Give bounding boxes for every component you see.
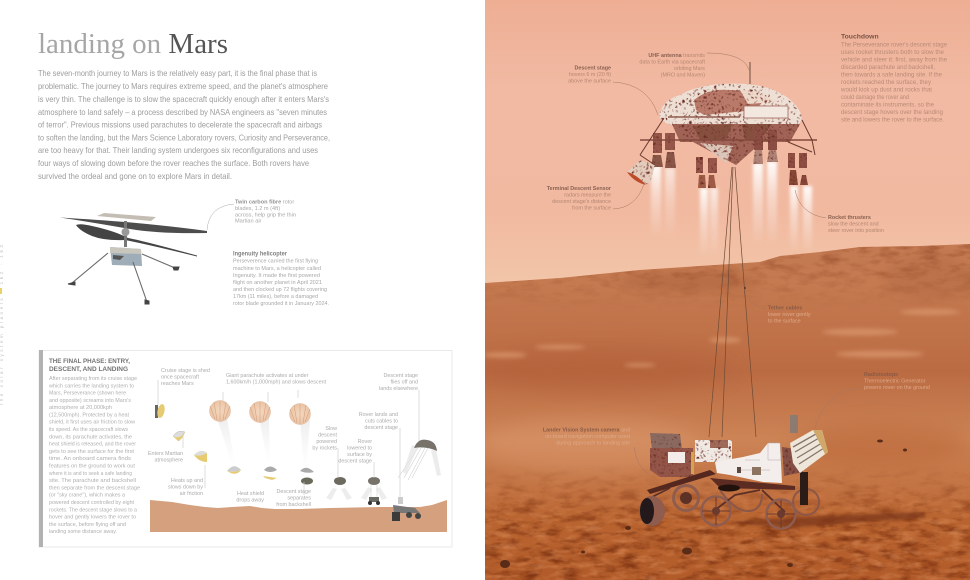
diagram labels: powered xyxy=(316,439,337,445)
text block: Touchdown: contaminate its instruments, so the xyxy=(841,102,935,108)
callout: descent stage: above the surface xyxy=(568,78,611,84)
panel text: atmosphere at 20,000kph xyxy=(49,405,112,411)
white panel on top xyxy=(744,106,788,118)
callout: terminal descent sensor: from the surface xyxy=(572,206,611,212)
callout: UHF antenna xyxy=(639,53,749,78)
diagram labels: Descent stage xyxy=(277,489,311,495)
text block: Touchdown: uses rocket thrusters both to slow the xyxy=(841,49,945,56)
diagram labels: lands elsewhere xyxy=(379,386,418,392)
callout: tether cables: to the surface xyxy=(768,318,801,324)
diagram labels: separates xyxy=(287,496,311,502)
panel text: shield, it first uses air friction to slow xyxy=(49,420,136,426)
diagram labels: surface by xyxy=(347,452,372,458)
panel text: hover and gently lowers the rover to xyxy=(49,515,136,521)
text block: Touchdown: rockets reached the surface, they xyxy=(841,79,932,86)
intro text block: survived the ordeal and gone on to explore Mars in detail. xyxy=(38,171,232,181)
body xyxy=(110,247,142,266)
text block: Ingenuity helicopter: flight on another planet in April 2021 xyxy=(233,280,322,286)
callout: descent stage xyxy=(568,66,658,115)
callout: radioisotope generator xyxy=(815,372,930,428)
light streak patches xyxy=(483,309,960,367)
icon: Perseverance rover xyxy=(639,415,828,528)
panel text: site. The parachute and backshell xyxy=(49,478,136,484)
panel text: powered descent controlled by eight xyxy=(49,500,134,506)
panel text: then separate from the descent stage xyxy=(49,485,140,491)
callout: UHF antenna: (MRO and Maven) xyxy=(661,72,705,78)
neck xyxy=(782,447,803,476)
sequence: entry capsules xyxy=(155,403,241,474)
diagram labels: Descent stage xyxy=(384,373,418,379)
panel text: where it is and to seek a safe landing xyxy=(48,471,132,477)
icon: descent stage xyxy=(627,62,817,188)
diagram labels: cuts cables to xyxy=(365,418,398,424)
panel text: down, its parachute activates, the xyxy=(49,434,132,440)
solar panel xyxy=(97,213,156,221)
diagram labels: descent stage xyxy=(338,458,372,464)
near centre wheel xyxy=(702,496,730,526)
intro text block: problematic. The journey to Mars requires extreme speed, and the planet's atmosphere xyxy=(38,81,328,91)
ground strip xyxy=(150,500,447,532)
front equipment xyxy=(650,448,693,477)
rear deck xyxy=(695,440,732,462)
tether cables xyxy=(709,167,756,437)
near right wheel xyxy=(766,500,796,528)
machinery deck xyxy=(672,124,800,165)
text block: Touchdown: would kick up dust and rocks that xyxy=(840,86,932,94)
panel text: (12,500mph). Protected by a heat xyxy=(49,412,129,418)
intro text block: are too heavy for that. Their landing system undergoes six reconfigurations and uses xyxy=(38,145,318,155)
text block: Touchdown: descent stage hovers over the landing xyxy=(841,109,944,116)
title: landing on Mars xyxy=(38,29,228,60)
callout: rocket thrusters: Rocket thrusters xyxy=(828,215,871,221)
panel text: Mars, Perseverance (shown here xyxy=(49,390,126,396)
diagram labels: Cruise stage is shed xyxy=(161,368,210,374)
diagram labels: descent xyxy=(318,432,337,438)
diagram labels: once spacecraft xyxy=(161,374,200,380)
text block: Touchdown: site and lowers the rover to the surface. xyxy=(841,116,944,124)
icon: Ingenuity helicopter xyxy=(60,213,207,304)
panel: Mars landscape photo xyxy=(470,0,970,580)
diagram labels: 1,600km/h (1,000mph) and slows descent xyxy=(226,379,327,385)
engines centre xyxy=(696,157,717,173)
diagram labels: descent stage xyxy=(364,425,398,431)
intro text block: four ways of slowing down before the rover reaches the surface. Both rovers have xyxy=(38,158,309,168)
terrain shading xyxy=(626,274,754,290)
upper body xyxy=(659,84,802,130)
callout: terminal descent sensor: Terminal Descent Sensor xyxy=(547,186,612,192)
intro text block: is very thin. The challenge is to slow the spacecraft quickly enough after it enters Mars's xyxy=(38,94,329,104)
diagram labels: slows down by xyxy=(168,484,203,490)
panel text: (or "sky crane"), which makes a xyxy=(49,493,126,499)
panel text: the surface, before flying off and xyxy=(49,522,126,528)
callout: lander vision system: Lander Vision System camera and xyxy=(543,428,630,434)
callout: lander vision system: during approach to landing site xyxy=(556,440,630,446)
diagram labels: lowered to xyxy=(347,446,372,452)
callout: terminal descent sensor: radars measure the xyxy=(564,192,611,198)
rocks xyxy=(500,440,907,568)
callout: rotor blades xyxy=(207,200,296,230)
sequence: parachutes xyxy=(210,400,310,470)
text block: Touchdown: discarded parachute and backshell, xyxy=(841,64,935,71)
panel text xyxy=(48,376,140,535)
callout: descent stage: hovers 6 m (20 ft) xyxy=(569,72,611,78)
intro text block: to soften the landing, but the Mars Science Laboratory rovers, Curiosity and Perseverance, xyxy=(38,132,330,142)
panel text: time. An onboard camera finds xyxy=(49,456,131,462)
diagram labels: air friction xyxy=(180,491,203,497)
diagram leader lines xyxy=(158,380,419,498)
text block: Touchdown: The Perseverance rover's descent stage xyxy=(841,42,948,48)
callout: tether cables: lower rover gently xyxy=(768,312,811,318)
panel text: features on the ground to work out xyxy=(49,464,135,470)
far wheels xyxy=(674,486,698,510)
callout: UHF antenna: data to Earth via spacecraft xyxy=(639,60,705,66)
intro text block: of terror". Previous missions used parachutes to decelerate the spacecraft and airbags xyxy=(38,120,322,130)
page background xyxy=(0,0,485,580)
text block: Ingenuity helicopter: rotor blade grounded it in January 2024. xyxy=(233,301,329,307)
diagram labels: by rockets xyxy=(312,446,337,452)
text block: Ingenuity helicopter: Ingenuity helicopter xyxy=(233,250,288,258)
terminal descent sensor xyxy=(627,160,655,185)
callout: UHF antenna: UHF antenna transmits xyxy=(648,53,705,59)
sequence: rover lands, stage flies off xyxy=(392,440,441,521)
panel text: landing some distance away. xyxy=(49,529,117,535)
text block: Ingenuity helicopter: Perseverence carried the first flying xyxy=(233,259,318,265)
callout: UHF antenna: orbiting Mars xyxy=(674,66,705,72)
diagram labels: Rover lands and xyxy=(359,412,398,418)
diagram labels: Heat shield xyxy=(237,491,264,497)
text block: Ingenuity helicopter: machine to Mars, a helicopter called xyxy=(233,266,321,272)
near left wheel xyxy=(639,496,665,526)
struts xyxy=(640,139,817,141)
diagram labels: from backshell xyxy=(276,502,311,508)
diagram labels: atmosphere xyxy=(155,458,183,464)
callout: radioisotope generator: Radioisotope xyxy=(864,372,898,378)
callout: rotor blades: across, help grip the thin xyxy=(235,212,296,218)
panel text: gets to see the surface for the first xyxy=(49,449,134,455)
rocket plumes xyxy=(651,161,812,258)
panel heading: THE FINAL PHASE: ENTRY, xyxy=(49,358,130,365)
panel text: rockets. The descent stage slows to a xyxy=(49,507,138,513)
callout: tether cables: Tether cables xyxy=(768,306,802,312)
engines left xyxy=(653,133,675,153)
intro text block: atmosphere to land safely – a process described by NASA engineers as "seven minutes xyxy=(38,107,327,117)
callout: rotor blades: Martian air xyxy=(235,218,262,224)
panel text: which carries the landing system to xyxy=(48,383,134,389)
panel text: its speed. As the spacecraft slows xyxy=(49,427,128,433)
diagram labels: Rover xyxy=(358,439,372,445)
text block: Ingenuity helicopter xyxy=(233,250,329,307)
diagram labels: Giant parachute activates at under xyxy=(226,373,309,379)
intro text block: The seven-month journey to Mars is the relatively easy part, it is the final phase that is xyxy=(38,68,317,78)
callout: terminal descent sensor: descent stage's distance xyxy=(552,199,611,205)
callout: rocket thrusters: steer rover into position xyxy=(828,228,884,234)
diagram labels: Slow xyxy=(325,426,337,432)
callout: rotor blades: blades, 1.2 m (4ft) xyxy=(235,206,280,212)
sequence: shield and stage separation xyxy=(263,466,314,484)
rover shadow xyxy=(725,512,925,528)
intro text block xyxy=(38,68,330,181)
text block: Ingenuity helicopter: 17km (11 miles), before a damaged xyxy=(233,294,318,300)
callout: terminal descent sensor xyxy=(547,184,644,212)
rotor blades xyxy=(60,218,207,233)
stand xyxy=(790,415,798,433)
panel text: After separating from its cruise stage xyxy=(49,376,137,382)
main body xyxy=(715,443,782,483)
engines right xyxy=(754,127,777,150)
panel text: heat shield is released, and the rover xyxy=(49,442,136,448)
diagram labels: reaches Mars xyxy=(161,381,194,387)
callout: rotor blades: Twin carbon fibre rotor xyxy=(235,200,294,206)
callout: descent stage: Descent stage xyxy=(574,66,611,72)
text block: Ingenuity helicopter: Ingenuity. It made the first powered xyxy=(233,273,320,279)
sequence: powered descent xyxy=(326,477,387,505)
diagram labels: drops away xyxy=(236,498,264,504)
callout: rocket thrusters: slow the descent and xyxy=(828,222,879,228)
panel: the final phase xyxy=(39,350,452,547)
panel heading xyxy=(49,358,130,373)
diagram labels: flies off and xyxy=(391,380,418,386)
panel text: and opposite) screams into Mars's xyxy=(49,398,131,404)
callout: rocket thrusters xyxy=(795,190,884,234)
text block: Touchdown: could damage the rover and xyxy=(841,94,909,101)
panel heading: DESCENT, AND LANDING xyxy=(49,366,128,373)
RTG xyxy=(790,430,828,473)
callout: lander vision system: on-board navigation computer used xyxy=(545,434,630,440)
chassis xyxy=(647,470,716,494)
text block: Touchdown xyxy=(840,34,948,124)
diagram labels xyxy=(148,368,418,508)
mast head xyxy=(650,433,682,449)
callout: radioisotope generator: powers rover on the ground xyxy=(864,385,930,391)
diagram labels: Heats up and xyxy=(171,478,203,484)
ground texture xyxy=(485,465,970,580)
callout: radioisotope generator: Thermoelectric Generator xyxy=(864,378,926,384)
legs xyxy=(72,253,175,302)
text block: Ingenuity helicopter: and then clocked up 72 flights covering xyxy=(233,287,327,293)
antenna xyxy=(749,62,751,84)
text block: Touchdown: then towards a safe landing site. If the xyxy=(841,72,943,78)
text block: Touchdown: vehicle and steer it: first, away from the xyxy=(841,56,948,64)
callout: tether cables xyxy=(744,287,811,324)
diagram labels: Enters Martian xyxy=(148,451,183,457)
text block: Touchdown: Touchdown xyxy=(841,34,879,40)
callout: lander vision system xyxy=(543,428,648,474)
